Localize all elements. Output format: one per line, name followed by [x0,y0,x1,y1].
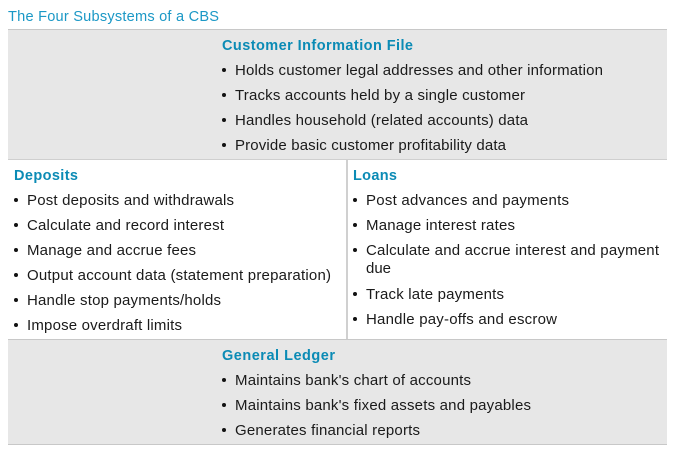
heading: general ledger: General Ledger [222,348,335,364]
list: loans items: Track late payments [366,286,504,303]
list: customer information file items [222,62,603,154]
list: customer information file items: Tracks accounts held by a single customer [235,87,525,104]
panel: loans [348,160,667,339]
panel: general ledger [8,339,667,445]
panel: customer information file [8,29,667,160]
list: loans items [353,192,660,328]
list: deposits items: Post deposits and withdrawals [27,192,234,209]
list: deposits items [14,192,331,334]
list: deposits items: Impose overdraft limits [27,317,182,334]
list: deposits items: Output account data (statement preparation) [27,267,331,284]
list: loans items: Manage interest rates [366,217,515,234]
title: The Four Subsystems of a CBS [8,9,219,25]
list: loans items: Calculate and accrue interest and payment [366,242,660,259]
heading: deposits: Deposits [14,168,78,184]
list: deposits items: Calculate and record interest [27,217,225,234]
list: general ledger items: Maintains bank's chart of accounts [235,372,471,389]
list: general ledger items: Generates financial reports [235,422,420,439]
list: loans items: due [366,260,391,277]
divider between deposits and loans [346,160,348,339]
heading: customer information file: Customer Information File [222,38,413,54]
list: loans items: Handle pay-offs and escrow [366,311,557,328]
list: deposits items: Manage and accrue fees [27,242,196,259]
list: customer information file items: Provide basic customer profitability data [235,137,507,154]
list: general ledger items: Maintains bank's fixed assets and payables [235,397,531,414]
list: loans items: Post advances and payments [366,192,569,209]
list: deposits items: Handle stop payments/holds [27,292,221,309]
panel: deposits [8,160,346,339]
list: customer information file items: Handles household (related accounts) data [235,112,529,129]
list: general ledger items [222,372,531,439]
heading: loans: Loans [353,168,397,184]
list: customer information file items: Holds customer legal addresses and other information [235,62,603,79]
